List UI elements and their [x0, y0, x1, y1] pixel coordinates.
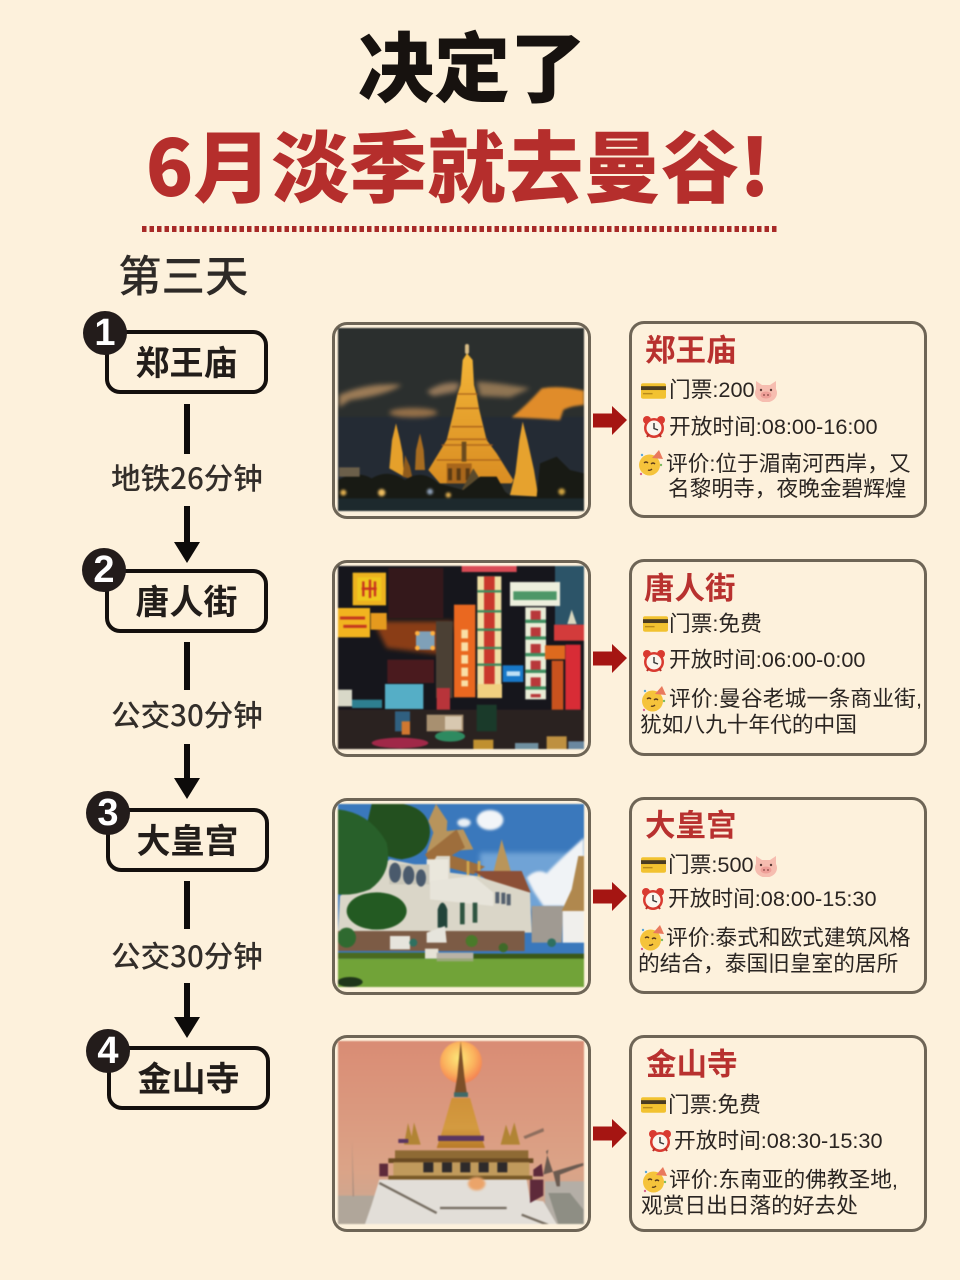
- review: 观赏日出日落的好去处: [641, 1193, 858, 1218]
- connector: bus 30 minutes: [111, 642, 263, 799]
- opening hours row: 开放时间:06:00-0:00: [669, 647, 865, 672]
- opening hours row: 开放时间:08:30-15:30: [674, 1128, 883, 1153]
- title: line one: 决定了: [358, 8, 586, 118]
- step 3: 大皇宫: 大皇宫: [136, 814, 238, 863]
- photo frame: Chinatown neon signs: [332, 560, 591, 757]
- step 2: 唐人街: 唐人街: [136, 575, 238, 624]
- step 2: 唐人街: 2: [93, 549, 115, 591]
- photo frame: Golden Mount at sunset: [332, 1035, 591, 1232]
- panel: 唐人街 info: [629, 559, 927, 756]
- review: [639, 450, 911, 501]
- ticket row: 门票:200: [669, 377, 755, 402]
- step 3: 大皇宫: [86, 791, 269, 872]
- connector: subway 26 minutes: [111, 404, 263, 563]
- ticket row: [641, 852, 777, 877]
- arrow: [593, 882, 627, 911]
- opening hours row: 开放时间:08:00-15:30: [668, 886, 877, 911]
- ticket row: [641, 377, 777, 402]
- connector: bus 30 minutes: 公交30分钟: [111, 934, 263, 976]
- ticket row: 门票:免费: [668, 1092, 761, 1117]
- place name: 唐人街: [644, 564, 736, 608]
- review: 评价:东南亚的佛教圣地,: [669, 1167, 898, 1192]
- review: 的结合，泰国旧皇室的居所: [638, 951, 898, 976]
- review: 犹如八九十年代的中国: [640, 712, 857, 737]
- heading: day three: 第三天: [118, 242, 248, 305]
- step 2: 唐人街: [82, 548, 268, 633]
- review: 名黎明寺，夜晚金碧辉煌: [668, 476, 907, 501]
- step 1: 郑王庙: 郑王庙: [136, 336, 238, 385]
- panel: 大皇宫 info: [629, 797, 927, 994]
- review: 评价:位于湄南河西岸，又: [666, 451, 911, 476]
- title: line two: 6月淡季就去曼谷!: [146, 107, 770, 219]
- step 4: 金山寺: 4: [97, 1030, 119, 1072]
- step 1: 郑王庙: 1: [94, 312, 116, 354]
- place name: 郑王庙: [645, 326, 736, 370]
- review: [641, 1167, 898, 1218]
- panel: 郑王庙 info: [629, 321, 927, 518]
- review: [640, 686, 922, 737]
- panel: 金山寺 info: [629, 1035, 927, 1232]
- place name: 大皇宫: [645, 801, 736, 845]
- connector: bus 30 minutes: 公交30分钟: [111, 693, 263, 735]
- photo frame: Wat Arun at night: [332, 322, 591, 519]
- step 1: 郑王庙: [83, 311, 268, 394]
- ticket row: 门票:免费: [669, 611, 762, 636]
- arrow: [593, 644, 627, 673]
- review: [638, 925, 911, 976]
- arrow: [593, 406, 627, 435]
- place name: 金山寺: [646, 1040, 738, 1084]
- step 4: 金山寺: 金山寺: [138, 1052, 240, 1101]
- ticket row: 门票:500: [668, 852, 754, 877]
- connector: subway 26 minutes: 地铁26分钟: [111, 456, 263, 498]
- review: 评价:泰式和欧式建筑风格: [666, 925, 911, 950]
- step 4: 金山寺: [86, 1029, 270, 1110]
- photo frame: Grand Palace: [332, 798, 591, 995]
- review: 评价:曼谷老城一条商业街,: [669, 686, 922, 711]
- step 3: 大皇宫: 3: [97, 792, 119, 834]
- connector: bus 30 minutes: [111, 881, 263, 1038]
- arrow: [593, 1119, 627, 1148]
- opening hours row: 开放时间:08:00-16:00: [669, 414, 878, 439]
